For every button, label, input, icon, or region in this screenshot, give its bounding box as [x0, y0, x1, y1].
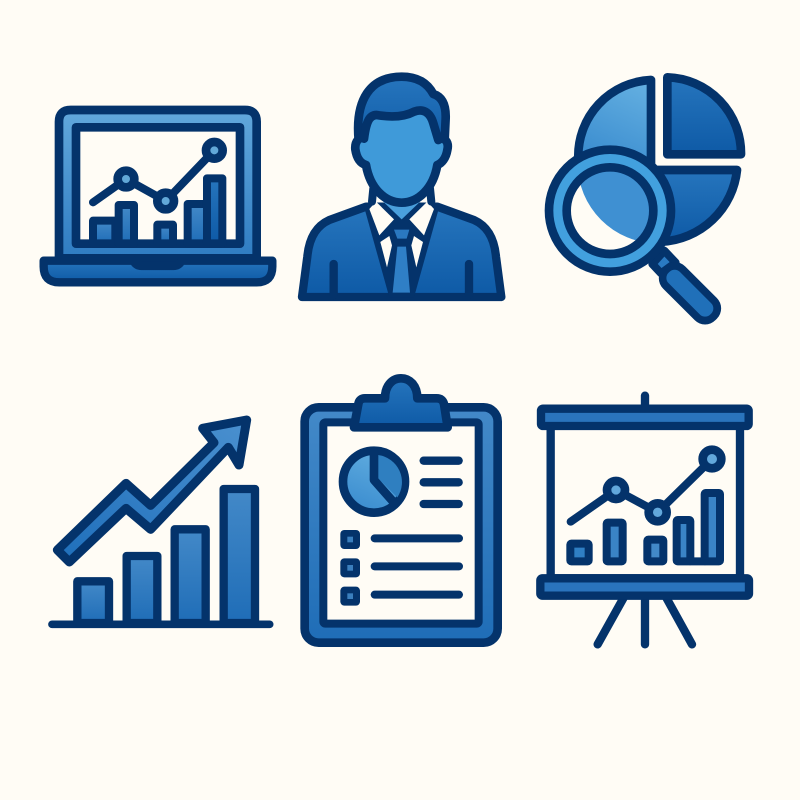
tripod legs — [598, 598, 692, 644]
screen trend line — [93, 142, 223, 209]
magnifier handle — [652, 251, 727, 331]
screen trend line — [571, 450, 721, 522]
top roller — [541, 409, 749, 426]
hair — [358, 77, 446, 153]
rising arrow — [57, 420, 247, 562]
icon: presentation screen — [540, 396, 749, 644]
screen bars — [570, 493, 720, 561]
pie slice: bottom right — [648, 170, 737, 242]
report pie chart — [343, 451, 405, 513]
icon: clipboard report — [305, 378, 498, 643]
icon: laptop with chart — [44, 110, 272, 282]
hanging pin — [632, 396, 657, 407]
face — [355, 110, 448, 203]
pie slice: top left — [578, 80, 651, 163]
laptop base — [44, 261, 272, 282]
bottom rail — [540, 578, 749, 596]
clip — [354, 378, 448, 427]
projection screen — [551, 425, 740, 578]
suit jacket — [302, 207, 501, 297]
neck — [377, 196, 426, 219]
laptop screen — [76, 127, 240, 244]
pie slice: top right — [667, 77, 741, 154]
checklist — [340, 530, 459, 606]
paper sheet — [323, 422, 479, 624]
neck sides — [372, 188, 431, 202]
laptop lid — [59, 110, 257, 258]
clipboard board — [305, 407, 498, 643]
icon: pie chart under magnifying glass — [549, 77, 741, 331]
shirt and lapels — [364, 202, 439, 297]
growth bars — [77, 489, 255, 623]
icon set canvas — [40, 72, 754, 648]
icon: growth bar chart with arrow — [52, 420, 270, 624]
magnifier lens ring — [549, 150, 671, 272]
text lines beside pie — [424, 461, 459, 504]
icon: businessman — [302, 77, 501, 297]
screen bar chart — [93, 178, 222, 243]
baseline — [52, 613, 270, 636]
necktie — [393, 230, 410, 293]
magnifier lens glass — [562, 163, 658, 258]
